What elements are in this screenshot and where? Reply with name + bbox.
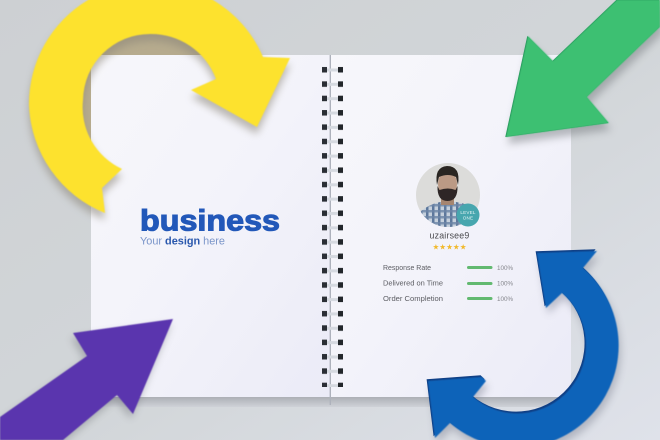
stat: response rate: 100%	[497, 265, 514, 272]
stat: delivered on time: Delivered on Time	[383, 278, 443, 288]
arrow: blue curved	[427, 249, 621, 440]
notebook	[91, 55, 571, 407]
logo: business: business	[140, 204, 280, 238]
username: uzairsee9	[430, 230, 469, 240]
stat: delivered on time: 100%	[497, 280, 514, 288]
level badge: ONE	[463, 216, 473, 220]
level badge	[456, 204, 480, 226]
stat: order completion: 100%	[497, 296, 514, 303]
arrow: yellow curved	[29, 0, 290, 220]
rating stars: ★★★★★	[432, 242, 467, 252]
stat: order completion: Order Completion	[383, 294, 443, 303]
tagline: Your design here	[140, 236, 225, 248]
stat: delivered on time	[383, 278, 514, 288]
level badge: LEVEL	[460, 210, 476, 215]
stat: order completion	[383, 294, 514, 303]
arrow: green	[505, 0, 660, 144]
spine fold	[330, 55, 331, 405]
tan surface behind yellow arrow	[78, 31, 222, 175]
stat: response rate	[383, 263, 514, 272]
left page	[91, 55, 330, 397]
arrow: purple	[0, 319, 173, 440]
spiral binding	[319, 64, 345, 387]
avatar photo	[416, 163, 480, 227]
stat: response rate: Response Rate	[383, 263, 431, 272]
right page	[331, 55, 571, 397]
profile card	[383, 163, 514, 303]
